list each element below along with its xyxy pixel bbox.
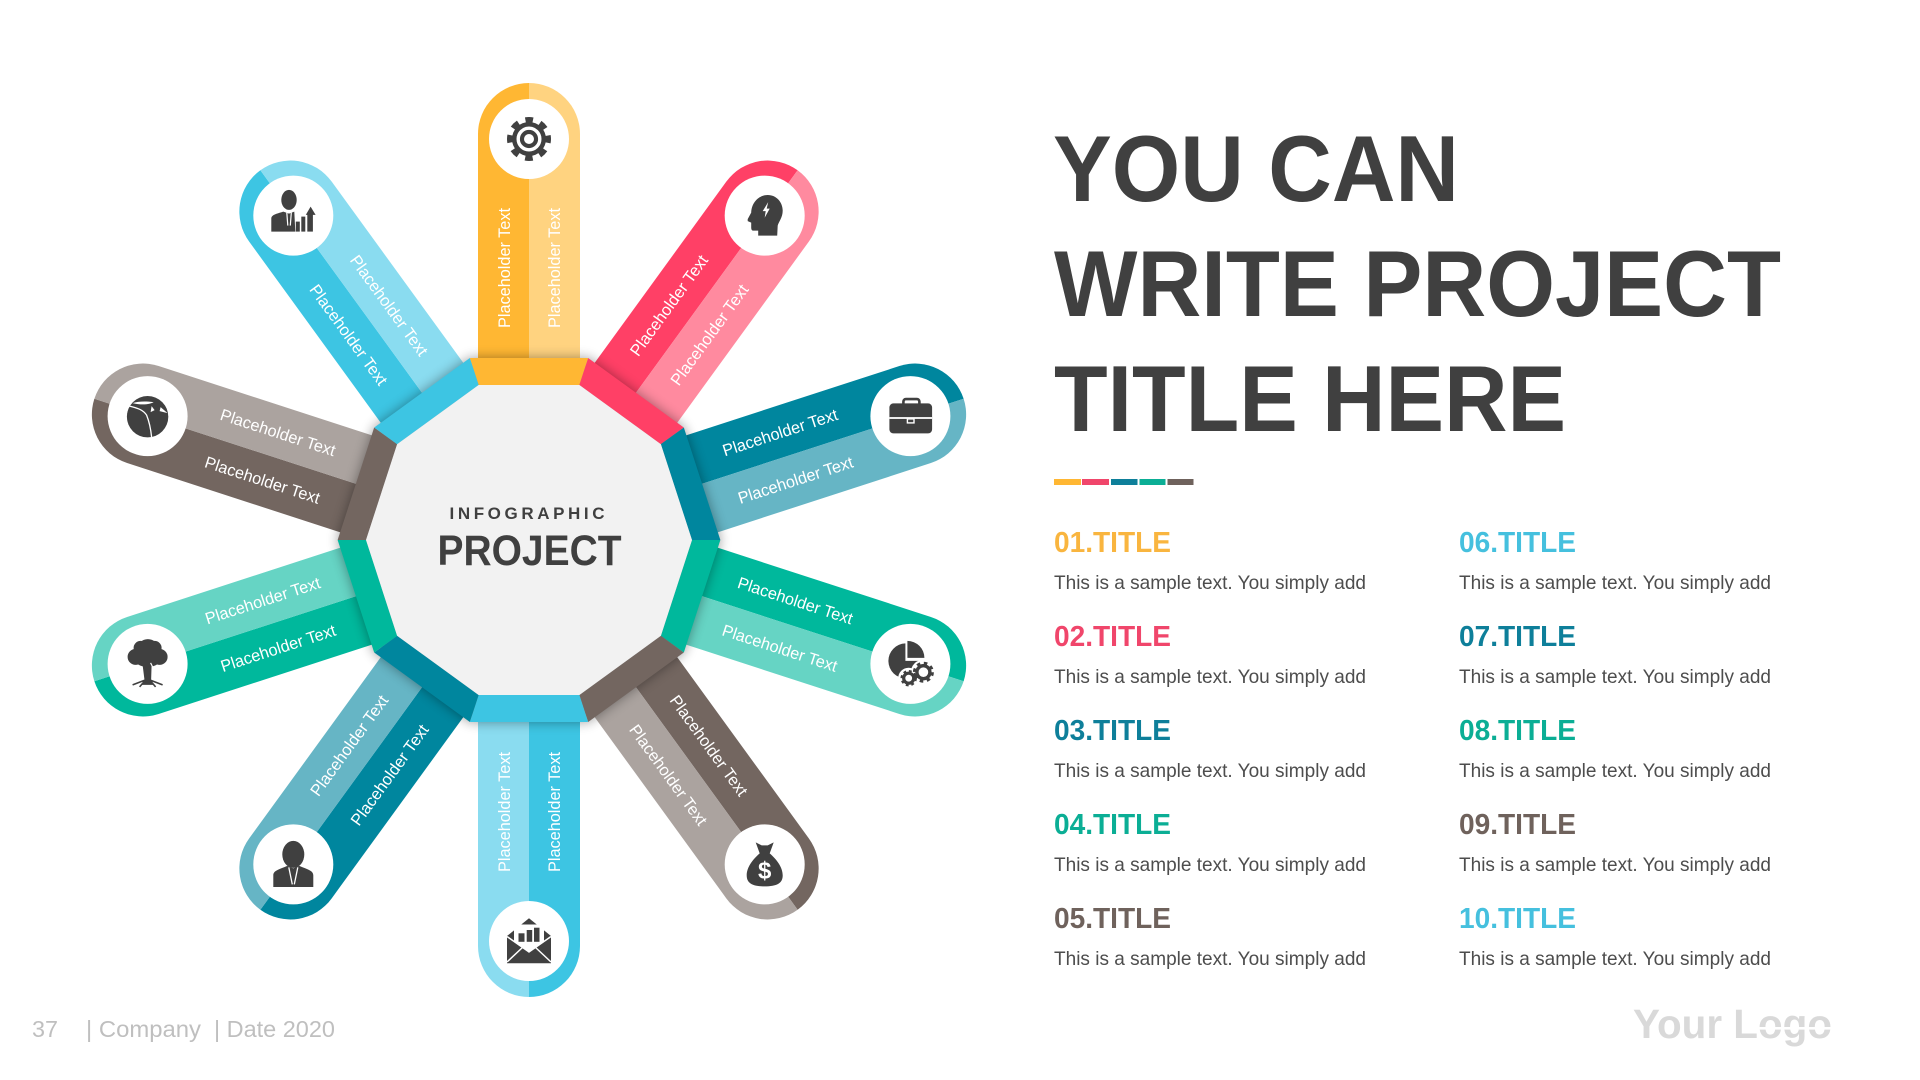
item 03: This is a sample text. You simply add: [1054, 760, 1366, 782]
arm 3: dark teal: Placeholder Text: [736, 453, 856, 508]
arm 7: dark teal: Placeholder Text: [348, 721, 433, 829]
title: WRITE PROJECT: [1054, 231, 1781, 336]
arm 6: blue: Placeholder Text: [496, 752, 514, 872]
item 06: 06.TITLE: [1459, 527, 1576, 559]
footer: | Date 2020: [214, 1016, 335, 1042]
item 09: This is a sample text. You simply add: [1459, 854, 1771, 876]
arm 9: brown: Placeholder Text: [202, 454, 323, 508]
arm 2: pink: Placeholder Text: [667, 281, 753, 389]
arm 2: pink: [588, 140, 839, 432]
icon: gear: [489, 99, 569, 179]
icon: globe: [108, 376, 188, 456]
arm 6: blue: Placeholder Text: [546, 752, 564, 872]
item 08: [1459, 715, 1771, 782]
item 09: 09.TITLE: [1459, 809, 1576, 841]
arm 5: brown: Placeholder Text: [625, 722, 711, 829]
item 05: [1054, 903, 1366, 970]
arm 4: green: Placeholder Text: [735, 574, 855, 628]
item 07: 07.TITLE: [1459, 621, 1576, 653]
item 02: 02.TITLE: [1054, 621, 1171, 653]
arm 1: yellow: [478, 83, 580, 370]
item 02: [1054, 621, 1366, 688]
centre label: project: PROJECT: [438, 528, 622, 575]
title: TITLE HERE: [1054, 346, 1566, 451]
arm 5: brown: [588, 648, 839, 940]
arm 4: green: [675, 544, 979, 730]
logo: Your Logo: [1633, 1001, 1832, 1047]
arm 4: green: Placeholder Text: [720, 622, 840, 676]
arm 9: brown: Placeholder Text: [218, 406, 338, 460]
arm 7: dark teal: [219, 648, 470, 940]
item 07: [1459, 621, 1771, 688]
item 10: [1459, 903, 1771, 970]
centre label: infographic: INFOGRAPHIC: [450, 504, 604, 523]
arm 5: brown: Placeholder Text: [666, 692, 751, 800]
arm 3: dark teal: Placeholder Text: [720, 406, 841, 460]
arm 2: pink: Placeholder Text: [627, 252, 712, 360]
icon: man with growth chart: [253, 176, 333, 256]
item 02: This is a sample text. You simply add: [1054, 666, 1366, 688]
footer: [32, 1016, 335, 1042]
item 06: [1459, 527, 1771, 594]
item 09: [1459, 809, 1771, 876]
item 03: 03.TITLE: [1054, 715, 1171, 747]
item 04: [1054, 809, 1366, 876]
item 07: This is a sample text. You simply add: [1459, 666, 1771, 688]
item 03: [1054, 715, 1366, 782]
item 10: 10.TITLE: [1459, 903, 1576, 935]
decagon ring of coloured bands: [338, 358, 720, 722]
arm 8: green: Placeholder Text: [203, 574, 323, 628]
item 10: This is a sample text. You simply add: [1459, 948, 1771, 970]
arm 7: dark teal: Placeholder Text: [307, 692, 392, 800]
icon: pie chart with gears: [870, 624, 950, 704]
item 08: This is a sample text. You simply add: [1459, 760, 1771, 782]
colour divider bar: [1054, 479, 1194, 485]
title: [1053, 116, 1781, 451]
item 05: This is a sample text. You simply add: [1054, 948, 1366, 970]
arm 8: green: [79, 544, 383, 730]
item 08: 08.TITLE: [1459, 715, 1576, 747]
centre decagon: [366, 385, 692, 695]
arm 9: brown: [79, 350, 383, 536]
item 01: [1054, 527, 1366, 594]
arm 8: green: Placeholder Text: [219, 622, 339, 676]
item 01: This is a sample text. You simply add: [1054, 572, 1366, 594]
icon: money bag: $: [758, 857, 772, 884]
icon: businessman: [253, 824, 333, 904]
arm 3: dark teal: [675, 350, 979, 536]
arm 10: blue: Placeholder Text: [306, 281, 391, 389]
arm 6: blue: [478, 710, 580, 997]
item 04: This is a sample text. You simply add: [1054, 854, 1366, 876]
icon: tree: [108, 624, 188, 704]
item 05: 05.TITLE: [1054, 903, 1171, 935]
item 01: 01.TITLE: [1054, 527, 1171, 559]
arm 1: yellow: Placeholder Text: [496, 208, 514, 328]
arm 10: blue: Placeholder Text: [346, 252, 431, 360]
icon: envelope with chart: [489, 901, 569, 981]
radial infographic diagram: [79, 83, 979, 997]
title: YOU CAN: [1053, 116, 1459, 221]
arm 10: blue: [219, 140, 470, 432]
footer: | Company: [86, 1016, 202, 1042]
footer: 37: [32, 1016, 58, 1042]
icon: money bag: [725, 824, 805, 904]
icon: briefcase: [870, 376, 950, 456]
arm 1: yellow: Placeholder Text: [546, 208, 564, 328]
item 06: This is a sample text. You simply add: [1459, 572, 1771, 594]
icon: head with lightning bolt: [725, 176, 805, 256]
item 04: 04.TITLE: [1054, 809, 1171, 841]
